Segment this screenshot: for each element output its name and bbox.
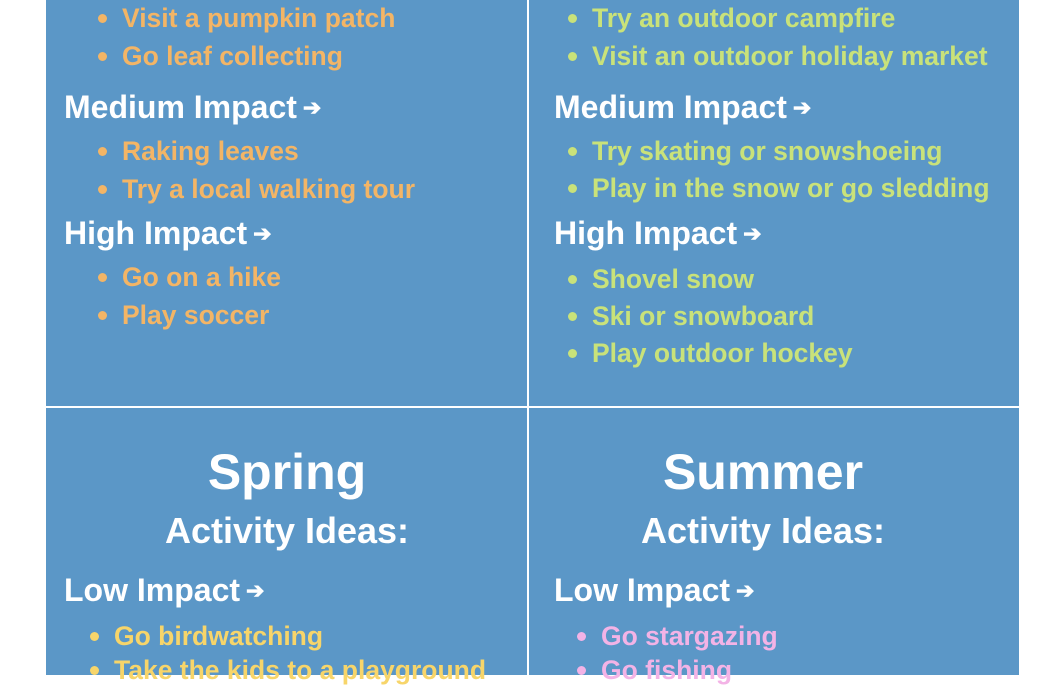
heading: High Impact ➔	[64, 215, 272, 251]
panel: spring	[64, 444, 486, 685]
subtitle: Activity Ideas:	[641, 510, 885, 551]
panel: summer	[554, 444, 885, 685]
item: Go fishing	[601, 655, 732, 685]
item: Visit a pumpkin patch	[122, 3, 395, 33]
item: Shovel snow	[592, 264, 754, 294]
panel: fall	[64, 3, 415, 330]
title: Spring	[208, 444, 366, 500]
heading: Medium Impact ➔	[64, 89, 321, 125]
item: Play outdoor hockey	[592, 338, 853, 368]
panel: winter	[554, 3, 990, 368]
item: Raking leaves	[122, 136, 299, 166]
heading: High Impact ➔	[554, 215, 762, 251]
subtitle: Activity Ideas:	[165, 510, 409, 551]
item: Visit an outdoor holiday market	[592, 41, 988, 71]
item: Ski or snowboard	[592, 301, 814, 331]
heading: Low Impact ➔	[554, 572, 754, 608]
item: Try skating or snowshoeing	[592, 136, 942, 166]
item: Try an outdoor campfire	[592, 3, 895, 33]
item: Take the kids to a playground	[114, 655, 486, 685]
item: Try a local walking tour	[122, 174, 415, 204]
item: Play soccer	[122, 300, 269, 330]
item: Go leaf collecting	[122, 41, 343, 71]
item: Go on a hike	[122, 262, 281, 292]
title: Summer	[663, 444, 863, 500]
heading: Medium Impact ➔	[554, 89, 811, 125]
item: Play in the snow or go sledding	[592, 173, 990, 203]
heading: Low Impact ➔	[64, 572, 264, 608]
item: Go stargazing	[601, 621, 778, 651]
item: Go birdwatching	[114, 621, 323, 651]
